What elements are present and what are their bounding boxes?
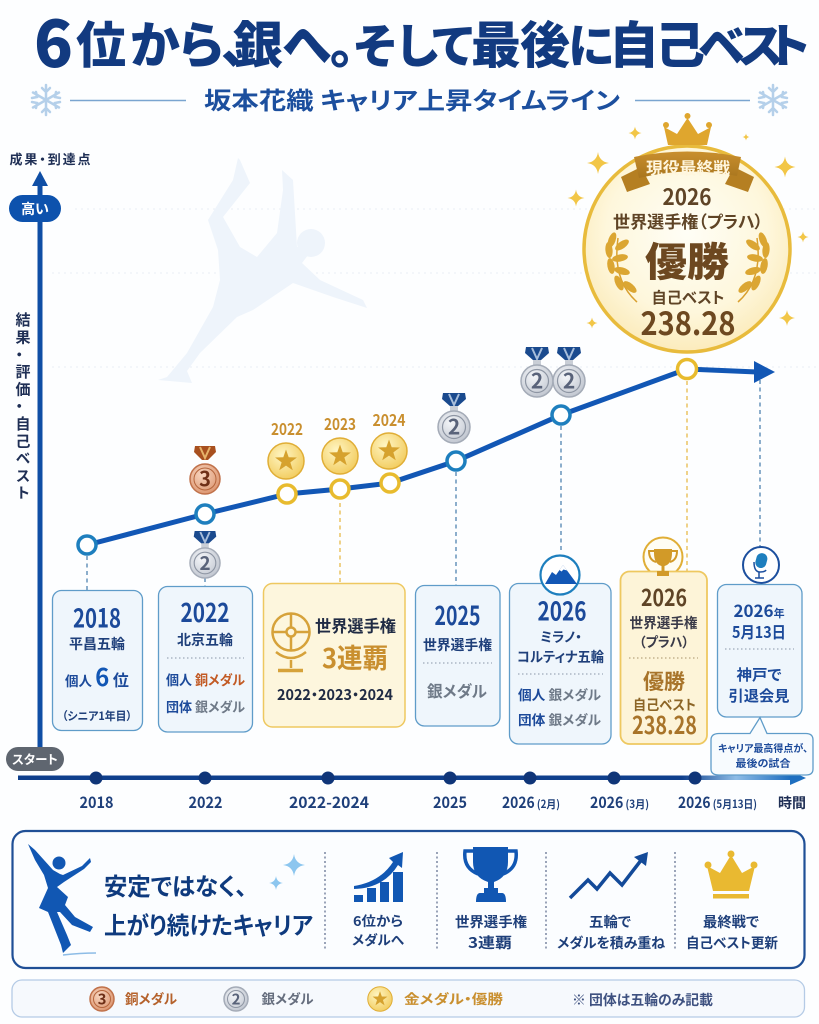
card: 2025: 2025 xyxy=(434,596,480,633)
card: 2026 Prague: 238.28 xyxy=(632,706,697,741)
panel: legend xyxy=(12,980,804,1017)
card: 2022 Beijing xyxy=(158,586,252,732)
icon: bronze medal 2022: 3 xyxy=(199,463,211,492)
card: 2026 Milano Cortina xyxy=(510,556,611,744)
card: 2026 Prague: 世界選手権 xyxy=(630,613,698,633)
card: 2022 Beijing: 個人 銅メダル xyxy=(166,669,246,689)
card: retirement press conference: 2026年 xyxy=(733,597,785,622)
panel: career summary: 3連覇 xyxy=(468,932,512,953)
icon: snowflake right xyxy=(759,85,787,115)
panel: career summary: 上がり続けたキャリア xyxy=(104,906,313,941)
dashed connectors xyxy=(87,380,760,590)
card: world three-peat: 世界選手権 xyxy=(315,613,396,637)
x axis: 2026 (2月) xyxy=(502,791,560,813)
card: world three-peat: 3連覇 xyxy=(322,637,388,676)
title: 位から、銀へ。そして最後に自己ベスト xyxy=(76,6,812,78)
card: 2026 Milano Cortina: 個人 銀メダル xyxy=(518,684,602,704)
y axis: 結果・評価・自己ベスト xyxy=(12,311,34,502)
gold medals 2022-2024 xyxy=(268,407,407,479)
icon: silver medal 2025: 2 xyxy=(448,412,460,442)
laurel right xyxy=(737,231,770,302)
x axis: 2022 xyxy=(188,791,222,813)
card: 2026 Prague: 優勝 xyxy=(643,666,685,696)
icon: rising bars xyxy=(354,852,403,902)
sparkles xyxy=(568,126,808,328)
callout: career-best in last match xyxy=(711,718,813,775)
callout: career-best in last match: キャリア最高得点が、 xyxy=(718,740,808,755)
x axis xyxy=(18,771,806,813)
card: 2026 Prague xyxy=(620,538,707,744)
icon: silver medals 2026 xyxy=(521,347,585,397)
start label xyxy=(6,747,64,771)
card: retirement press conference: 神戸で xyxy=(736,664,782,685)
x axis: 2026 (3月) xyxy=(590,791,649,813)
card: 2026 Prague: 自己ベスト xyxy=(633,695,696,715)
ribbon xyxy=(621,152,754,192)
card: 2018: （シニア1年目） xyxy=(62,708,132,724)
crown xyxy=(663,113,712,145)
laurel left xyxy=(605,231,638,302)
hero badge: 2026 world championships: 世界選手権（プラハ） xyxy=(613,208,763,233)
icon: globe trophy xyxy=(272,614,310,670)
career rising line xyxy=(87,361,775,545)
panel: career summary: 自己ベスト更新 xyxy=(686,933,778,953)
y axis: 成果・到達点 xyxy=(10,149,90,168)
gold medals 2022-2024: 2023 xyxy=(324,411,356,435)
gold medals 2022-2024: 2024 xyxy=(372,407,406,431)
panel: career summary: 安定ではなく、 xyxy=(104,867,247,902)
panel: career summary: 最終戦で xyxy=(703,912,760,932)
ribbon: 現役最終戦 xyxy=(646,155,731,179)
card: world three-peat: 2022・2023・2024 xyxy=(277,684,393,705)
background grid lines xyxy=(52,209,819,367)
icon: silver legend: 2 xyxy=(232,988,241,1010)
x axis: 2018 xyxy=(80,791,114,813)
panel: legend: 銅メダル xyxy=(125,988,178,1008)
panel: career summary: 6位から xyxy=(353,910,403,930)
panel: legend: 金メダル・優勝 xyxy=(404,988,504,1008)
icon: snowflake left xyxy=(32,85,60,115)
hero badge: 2026 world championships: 優勝 xyxy=(645,230,729,288)
card: 2026 Milano Cortina: 2026 xyxy=(538,592,586,628)
x axis: 2026 (5月13日) xyxy=(678,791,757,813)
card: 2022 Beijing: 2022 xyxy=(180,593,230,630)
icon: trophy xyxy=(465,847,516,902)
skater silhouette watermark xyxy=(158,158,367,383)
card: 2026 Milano Cortina: コルティナ五輪 xyxy=(517,647,604,667)
card: 2018: 個人 6 位 xyxy=(65,658,129,693)
icon: silver medal 2022 xyxy=(190,531,220,578)
icon: silver medals 2026: 2 xyxy=(563,366,575,396)
card: retirement press conference xyxy=(718,547,802,717)
panel: legend: 銀メダル xyxy=(262,988,314,1008)
card: world three-peat xyxy=(264,584,405,727)
card: 2026 Milano Cortina: ミラノ・ xyxy=(540,626,582,646)
icon: silver medals 2026: 2 xyxy=(531,366,543,396)
icon: zigzag arrow xyxy=(570,852,648,898)
card: 2022 Beijing: 団体 銀メダル xyxy=(166,696,246,716)
card: 2022 Beijing: 北京五輪 xyxy=(177,630,233,650)
y axis: 高い xyxy=(21,199,49,219)
icon: microphone xyxy=(743,547,779,583)
card: 2026 Prague: （プラハ） xyxy=(639,631,689,651)
card: retirement press conference: 引退会見 xyxy=(728,685,790,706)
icon: gold legend xyxy=(368,987,392,1011)
icon: mountain xyxy=(540,556,580,594)
card: retirement press conference: 5月13日 xyxy=(732,619,786,643)
panel: career summary: 五輪で xyxy=(589,912,632,932)
hero badge: 2026 world championships xyxy=(568,113,808,352)
start label: スタート xyxy=(12,749,58,768)
card: 2018 xyxy=(52,590,142,730)
card: 2018: 平昌五輪 xyxy=(69,634,125,654)
x axis: 2022-2024 xyxy=(289,791,369,813)
icon: bronze medal 2022 xyxy=(190,446,220,494)
icon: silver medal 2025 xyxy=(438,393,470,443)
hero badge: 2026 world championships: 2026 xyxy=(662,180,712,212)
panel: legend: ※ 団体は五輪のみ記載 xyxy=(572,990,713,1010)
line nodes xyxy=(78,360,696,554)
icon: skater silhouette xyxy=(28,844,93,953)
icon: crown xyxy=(704,850,758,898)
panel: career summary: メダルへ xyxy=(352,929,405,949)
hero badge: 2026 world championships: 自己ベスト xyxy=(652,286,724,308)
icon: silver medal 2022: 2 xyxy=(199,549,211,576)
icon: bronze legend: 3 xyxy=(98,988,106,1010)
panel: career summary: 世界選手権 xyxy=(455,912,527,932)
panel: career summary xyxy=(12,831,804,968)
card: 2026 Milano Cortina: 団体 銀メダル xyxy=(518,709,602,729)
card: 2025: 世界選手権 xyxy=(423,635,492,655)
card: 2025 xyxy=(416,586,500,726)
y axis xyxy=(9,149,90,748)
gold medals 2022-2024: 2022 xyxy=(271,416,303,440)
x axis: 時間 xyxy=(778,793,806,813)
icon: bronze legend xyxy=(90,987,114,1011)
card: 2025: 銀メダル xyxy=(427,678,487,702)
sparkles xyxy=(269,854,305,890)
x axis: 2025 xyxy=(433,791,467,813)
icon: trophy xyxy=(649,549,677,576)
subtitle: 坂本花織 キャリア上昇タイムライン xyxy=(204,81,620,116)
callout: career-best in last match: 最後の試合 xyxy=(736,755,790,770)
panel: career summary: メダルを積み重ね xyxy=(557,933,665,953)
card: 2018: 2018 xyxy=(73,598,121,636)
card: 2026 Prague: 2026 xyxy=(641,579,687,613)
hero badge: 2026 world championships: 238.28 xyxy=(640,299,736,345)
icon: silver legend xyxy=(224,987,248,1011)
